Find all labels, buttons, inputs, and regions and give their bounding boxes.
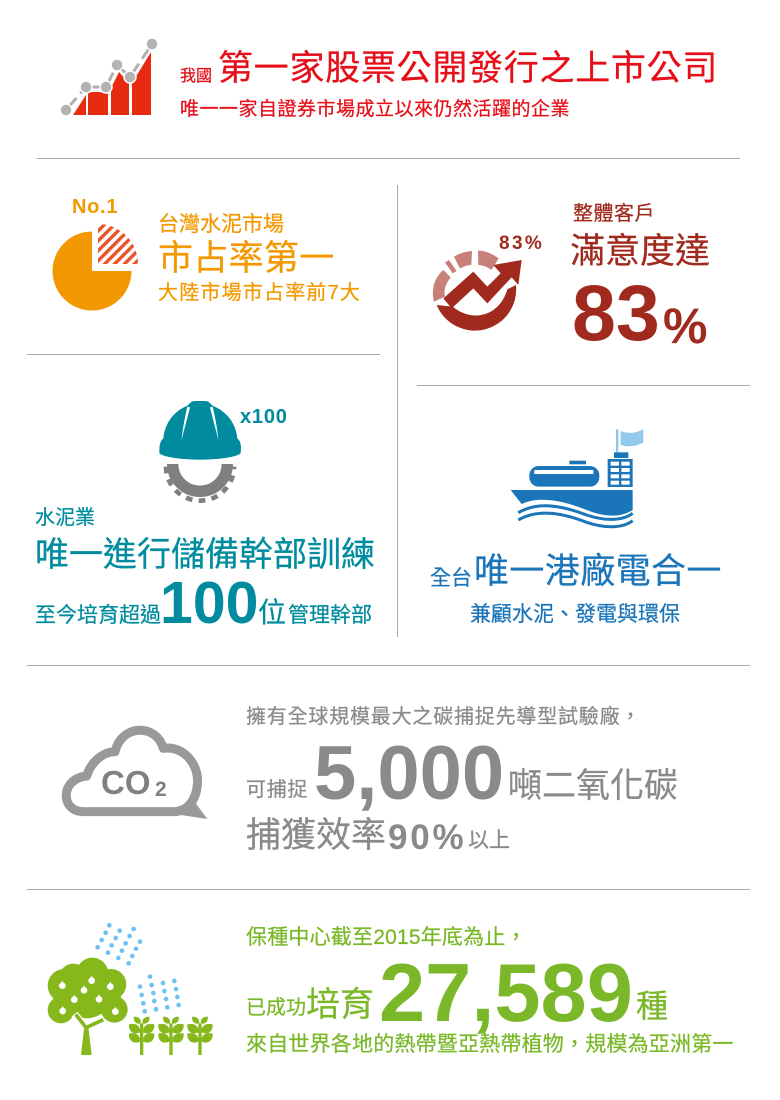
text: conservation center: 種 [636,988,668,1024]
text: management training: 管理幹部 [288,604,372,627]
text: carbon capture: 可捕捉 [246,779,308,801]
text: conservation center: 保種中心截至2015年底為止， [246,926,527,949]
heading: title: 唯一一家自證券市場成立以來仍然活躍的企業 [180,99,570,120]
text: carbon capture: 擁有全球規模最大之碳捕捉先導型試驗廠， [246,706,641,728]
text: carbon capture [246,706,678,857]
text: conservation center [246,926,734,1056]
heading: title: 第一家股票公開發行之上市公司 [218,49,718,88]
text: satisfaction [570,202,710,357]
text: management training: 100 [160,570,258,636]
text: management training: 至今培育超過 [35,604,161,627]
label: 83%: 83% [499,233,544,254]
text: satisfaction: 滿意度達 [570,232,710,271]
text: port and plant: 全台 [430,567,472,590]
text: port and plant: 唯一港廠電合一 [474,552,722,591]
label: No.1: No.1 [72,196,118,218]
text: conservation center: 來自世界各地的熱帶暨亞熱帶植物，規模為亞洲第一 [246,1033,734,1056]
text: management training: 水泥業 [35,507,95,529]
heading: title [180,49,718,120]
text: conservation center: 27,589 [379,946,633,1039]
text: carbon capture: 捕獲效率 [246,816,386,855]
heading: title: 我國 [180,68,212,85]
text: market share: 市占率第一 [158,239,335,278]
text: conservation center: 已成功 [246,997,306,1019]
label: CO2: 2 [155,778,167,801]
icon: ship with flag [510,429,644,528]
label: x100: x100 [240,406,288,428]
text: port and plant: 兼顧水泥、發電與環保 [470,603,680,626]
icon: tree, rain and seedlings [48,923,213,1055]
text: management training [35,507,375,636]
text: market share: 大陸市場市占率前7大 [158,282,361,304]
icon: rising chart [60,38,158,116]
text: satisfaction: 83 [572,268,660,357]
icon: market share pie [52,224,138,310]
icon: satisfaction arrow gauge [432,250,522,331]
text: carbon capture: 噸二氧化碳 [508,767,678,805]
text: carbon capture: 90% [388,818,466,857]
text: market share [158,212,361,304]
text: satisfaction: % [663,298,707,354]
text: market share: 台灣水泥市場 [158,213,284,236]
text: management training: 唯一進行儲備幹部訓練 [35,536,375,574]
text: conservation center: 培育 [306,986,374,1024]
icon: CO2 cloud [62,726,208,819]
icon: helmet and gear [159,401,241,503]
text: port and plant [430,552,722,626]
text: management training: 位 [258,597,286,628]
text: satisfaction: 整體客戶 [573,203,655,225]
text: carbon capture: 5,000 [314,731,504,816]
label: CO2: CO [101,764,150,801]
text: carbon capture: 以上 [468,829,510,852]
